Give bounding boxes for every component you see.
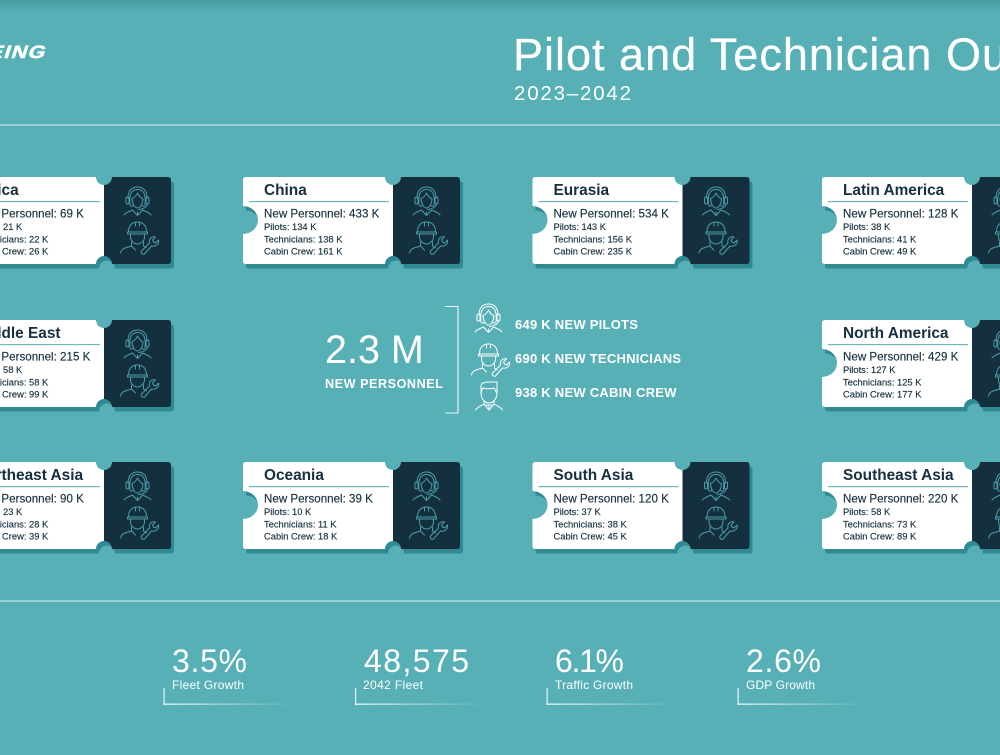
card: Latin America: New Personnel: 128 K — [843, 208, 959, 220]
card: South Asia: New Personnel: 120 K — [554, 492, 669, 506]
stat: 2042 fleet: 48,575 — [364, 643, 469, 679]
stat: 2042 fleet: 2042 Fleet — [363, 678, 424, 692]
card: Oceania: Technicians: 11 K — [264, 520, 337, 530]
card: Oceania: Pilots: 10 K — [264, 507, 312, 517]
stat: GDP growth: 2.6% — [746, 643, 821, 679]
card: China: Pilots: 134 K — [264, 222, 317, 232]
card: South Asia — [532, 462, 752, 554]
stat: GDP growth: GDP Growth — [746, 678, 815, 692]
card: Eurasia: Pilots: 143 K — [554, 222, 607, 232]
card: China: Technicians: 138 K — [264, 234, 343, 244]
card: China — [243, 177, 463, 268]
stat: traffic growth: 6.1% — [555, 643, 624, 679]
stat: traffic growth — [546, 643, 676, 705]
card: South Asia: Technicians: 38 K — [554, 520, 628, 530]
card: Eurasia — [532, 177, 752, 268]
card: Eurasia: Technicians: 156 K — [554, 234, 633, 244]
card: Northeast Asia — [0, 462, 174, 554]
card: Southeast Asia: New Personnel: 220 K — [843, 492, 959, 506]
card: Latin America: Cabin Crew: 49 K — [843, 246, 917, 256]
stat: fleet growth: 3.5% — [172, 643, 247, 679]
total personnel label: NEW PERSONNEL — [325, 377, 443, 391]
total personnel figure: 2.3 M — [325, 328, 424, 372]
card: Latin America: Pilots: 38 K — [843, 222, 891, 232]
stat: GDP growth — [738, 643, 868, 705]
card: Middle East — [0, 320, 174, 412]
card: Southeast Asia: Pilots: 58 K — [843, 507, 891, 517]
card: Oceania — [243, 462, 463, 554]
card: Oceania: Oceania — [264, 467, 324, 484]
card: Southeast Asia: Cabin Crew: 89 K — [843, 532, 917, 542]
card: Eurasia: New Personnel: 534 K — [554, 208, 669, 220]
bracket — [445, 306, 458, 413]
icon: cabin crew — [476, 382, 502, 410]
card: Latin America — [822, 177, 1000, 268]
card: China: Cabin Crew: 161 K — [264, 246, 343, 256]
card: Eurasia: Cabin Crew: 235 K — [554, 246, 633, 256]
card: Eurasia: Eurasia — [554, 182, 610, 199]
card: China: New Personnel: 433 K — [264, 208, 380, 220]
card: Oceania: New Personnel: 39 K — [264, 492, 373, 506]
stat: 2042 fleet — [355, 643, 485, 705]
card: Africa — [0, 177, 174, 268]
icon: pilot — [475, 304, 502, 332]
card: North America: Cabin Crew: 177 K — [843, 390, 922, 400]
card: China: China — [264, 182, 307, 199]
card: North America: Pilots: 127 K — [843, 365, 896, 375]
stat: fleet growth — [164, 643, 294, 705]
stat: traffic growth: Traffic Growth — [555, 678, 633, 692]
card: North America — [822, 320, 1000, 412]
card: North America: New Personnel: 429 K — [843, 350, 959, 364]
card: Southeast Asia: Southeast Asia — [843, 467, 954, 484]
card: South Asia: South Asia — [554, 467, 634, 484]
card: Latin America: Technicians: 41 K — [843, 234, 917, 244]
subtitle: 2023–2042 — [514, 82, 633, 105]
card: North America: Technicians: 125 K — [843, 378, 922, 388]
card: South Asia: Cabin Crew: 45 K — [554, 532, 627, 542]
new technicians label: 690 K NEW TECHNICIANS — [515, 351, 681, 366]
card: South Asia: Pilots: 37 K — [554, 507, 602, 517]
card: North America: North America — [843, 325, 949, 342]
new pilots label: 649 K NEW PILOTS — [515, 317, 638, 332]
new cabin crew label: 938 K NEW CABIN CREW — [515, 385, 677, 400]
card: Southeast Asia — [822, 462, 1000, 554]
card: Latin America: Latin America — [843, 182, 945, 199]
stat: fleet growth: Fleet Growth — [172, 678, 244, 692]
card: Southeast Asia: Technicians: 73 K — [843, 520, 917, 530]
card: Oceania: Cabin Crew: 18 K — [264, 532, 338, 542]
icon: technician — [472, 344, 510, 376]
